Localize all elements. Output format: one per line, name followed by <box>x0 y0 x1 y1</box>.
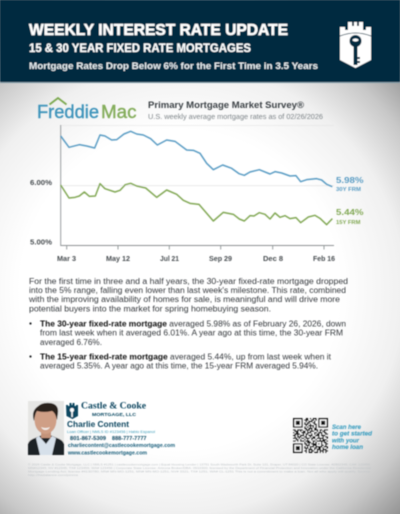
line: 30-year FRM <box>61 131 332 187</box>
bullet: 30-year rate: The 30-year fixed-rate mortgage averaged 5.98% as of February 26, 2026, down <box>40 319 346 328</box>
chart subheading: U.S. weekly average mortgage rates as of 02/26/2026 <box>148 114 323 121</box>
x axis labels: Feb 16 <box>313 256 335 263</box>
x axis labels: May 12 <box>106 256 130 263</box>
intro paragraph: For the first time in three and a half years, the 30-year fixed-rate mortgage dropped <box>29 277 348 286</box>
icon: roof <box>50 98 66 104</box>
x axis labels: Jul 21 <box>160 256 179 263</box>
bullet: 15-year rate <box>29 352 332 371</box>
agent details <box>67 420 175 456</box>
intro paragraph <box>28 277 348 313</box>
bullet: 15-year rate: averaged 5.35%. A year ago at this time, the 15-year FRM averaged 5.94%. <box>40 362 318 371</box>
agent details: www.castlecookemortgage.com <box>67 450 147 456</box>
agent details: 801-867-5309 <box>70 436 107 442</box>
legal disclaimer: Mortgage Lending Act; license #4130780; MN# MN-MO-1251; MN# MN-MO-1251; NV# 3321; TX# 1251; WA# CL-1251 This is not a commitment to make a loan. Not all who apply will qualify. Source: <box>28 470 371 474</box>
x axis labels: Dec 8 <box>263 256 283 263</box>
x axis labels: Sep 29 <box>209 256 232 263</box>
label: 30Y FRM: 5.98% <box>336 175 364 185</box>
bullet: 30-year rate: from last week when it averaged 6.01%. A year ago at this time, the 30-year FRM <box>40 329 343 338</box>
agent details: charliecontent@castlecookemortgage.com <box>68 443 175 449</box>
intro paragraph: into the 5% range, falling even lower than last week's milestone. This rate, combined <box>29 286 346 295</box>
header banner <box>0 0 400 83</box>
logo: Freddie Mac: Mac <box>101 101 136 122</box>
agent photo <box>28 401 64 455</box>
label: 15Y FRM <box>336 207 364 226</box>
logo: Freddie Mac <box>37 98 136 122</box>
bullet: 30-year rate: averaged 6.76%. <box>40 338 102 347</box>
company logo: Castle & Cooke <box>81 400 146 410</box>
line: 15-year FRM <box>61 183 332 225</box>
intro paragraph: potential buyers into the market for spring homebuying season. <box>29 304 271 313</box>
legal disclaimer: MN#12345; NV #12345; TX# 123456; WA# 123456 | Corporate State License: Arizona Broker/DBA: 0910300; licensed by the Department of Financial Protection and Innovation under the California Residential <box>28 466 371 470</box>
logo: Freddie Mac: Freddie <box>37 101 99 122</box>
scan call to action: Scan here <box>332 424 361 431</box>
icon: castle key shield <box>340 22 371 68</box>
icon: castle key <box>66 403 78 419</box>
QR code <box>293 418 328 453</box>
intro paragraph: with the improving availability of homes for sale, is meaningful and will drive more <box>28 295 340 304</box>
scan call to action: with your <box>332 437 360 444</box>
y axis labels: 6.00% <box>30 180 53 187</box>
scan call to action: to get started <box>332 430 372 438</box>
scan call to action: home loan <box>332 444 363 451</box>
agent details: 888-777-7777 <box>112 436 146 442</box>
bullet: 30-year rate <box>29 319 346 347</box>
company logo <box>66 400 146 419</box>
legal disclaimer <box>28 462 371 477</box>
y axis labels <box>30 180 53 246</box>
subtitle: 15 & 30 YEAR FIXED RATE MORTGAGES <box>29 43 251 55</box>
bullet: 15-year rate: The 15-year fixed-rate mortgage averaged 5.44%, up from last week when it <box>40 352 332 361</box>
label: 30Y FRM: 30Y FRM <box>336 187 361 193</box>
chart axes <box>61 125 334 250</box>
x axis labels <box>57 256 335 263</box>
title: WEEKLY INTEREST RATE UPDATE <box>29 22 288 39</box>
headline: Mortgage Rates Drop Below 6% for the First Time in 3.5 Years <box>29 60 318 71</box>
label: 15Y FRM: 5.44% <box>336 207 364 217</box>
legal disclaimer: http://hsdalance.com/pmms <box>28 473 79 477</box>
agent details: Charlie Content <box>67 420 129 429</box>
company logo: MORTGAGE, LLC <box>92 412 137 418</box>
line chart: mortgage rates <box>30 125 364 263</box>
label: 30Y FRM <box>336 175 364 193</box>
x axis labels: Mar 3 <box>57 256 76 263</box>
agent details: Loan Officer | NMLS ID #123456 | Hablo Espanol <box>67 429 155 434</box>
y axis labels: 5.00% <box>30 240 53 246</box>
chart heading: Primary Mortgage Market Survey® <box>148 100 304 111</box>
label: 15Y FRM: 15Y FRM <box>336 220 361 226</box>
scan call to action <box>332 424 372 451</box>
legal disclaimer: © 2026 Castle & Cooke Mortgage, LLC | NMLS #1251 | castlecookemortgage.com | Equal Housing Lender | 13751 South Wadsworth Park Dr, Suite 101, Draper, UT 84020 | CO State License: #2802345; CA#: 123456; <box>28 462 371 466</box>
